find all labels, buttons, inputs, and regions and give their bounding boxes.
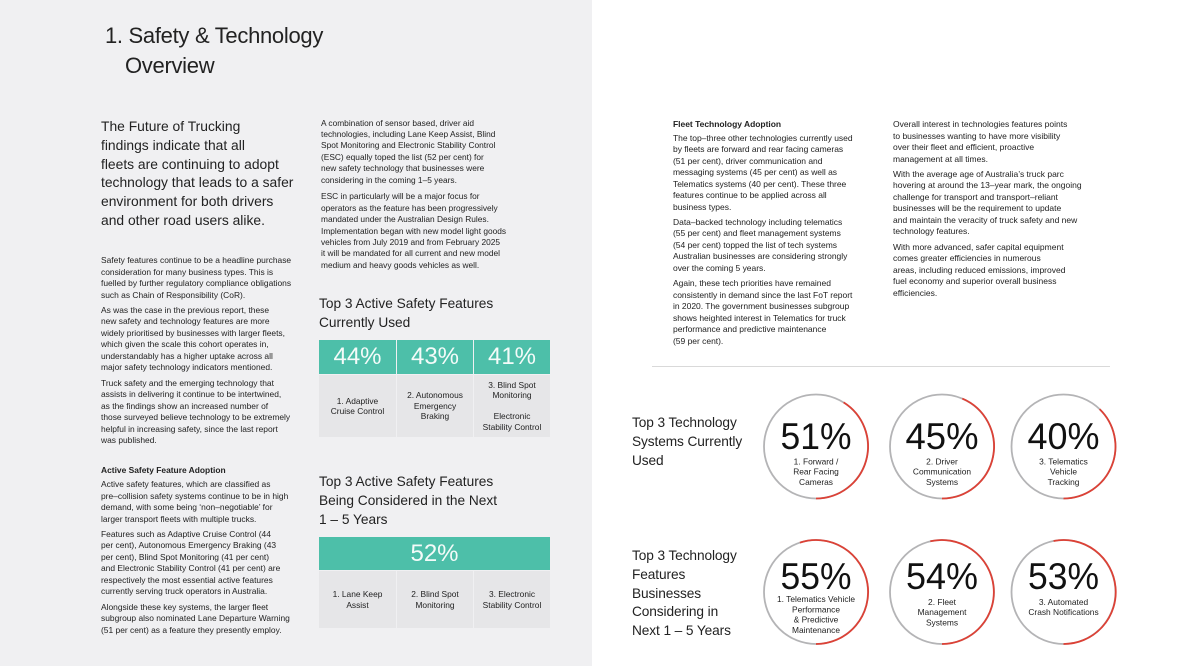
ring: 53 per cent: 53%	[1028, 556, 1099, 597]
ring: 55 per cent	[764, 540, 868, 644]
text block: sensor technologies: Spot Monitoring and Electronic Stability Control	[321, 140, 495, 150]
heading: systems currently used: Top 3 Technology	[632, 415, 737, 430]
stat: 52 per cent: 52%	[410, 540, 459, 566]
text block: overall interest: areas, including reduced emissions, improved	[893, 265, 1065, 275]
text block: fleet technology adoption: (59 per cent).	[673, 336, 723, 346]
text block: overall interest: With more advanced, safer capital equipment	[893, 242, 1064, 252]
ring: 51 per cent: 1. Forward /	[794, 456, 839, 466]
intro text: fleets are continuing to adopt	[101, 156, 279, 172]
ring: 53 per cent	[1012, 540, 1116, 644]
text block: safety features: Safety features continue to be a headline purchase	[101, 255, 291, 265]
label: electronic stability control: 3. Electronic	[489, 589, 535, 599]
text block: safety features: major safety technology indicators mentioned.	[101, 362, 272, 372]
text block: active safety feature adoption: larger transport fleets with multiple trucks.	[101, 514, 256, 524]
ring: 53 per cent: 3. Automated	[1039, 597, 1089, 607]
text block: overall interest: and maintain the veracity of truck safety and new	[893, 215, 1077, 225]
stat: 44 per cent	[319, 340, 396, 374]
label: blind spot and stability control: Monitoring	[492, 390, 532, 400]
text block: fleet technology adoption: performance and predictive maintenance	[673, 324, 826, 334]
label: autonomous emergency braking	[397, 375, 473, 437]
intro text: technology that leads to a safer	[101, 174, 293, 190]
text block: overall interest: hovering at around the 13–year mark, the ongoing	[893, 180, 1082, 190]
label: adaptive cruise control: 1. Adaptive	[337, 396, 378, 406]
text block: sensor technologies: considering in the coming 1–5 years.	[321, 175, 457, 185]
text block: fleet technology adoption: (55 per cent) and fleet management systems	[673, 228, 841, 238]
text block: overall interest: With the average age of Australia’s truck parc	[893, 169, 1064, 179]
text block: fleet technology adoption: Australian businesses are considering strongly	[673, 251, 847, 261]
text block: active safety feature adoption: subgroup also nominated Lane Departure Warning	[101, 613, 290, 623]
ring: 45 per cent: 2. Driver	[926, 456, 958, 466]
text block: fleet technology adoption: Telematics systems (40 per cent). These three	[673, 178, 846, 188]
ring: 55 per cent: 1. Telematics Vehicle	[777, 594, 855, 604]
ring: 54 per cent: 2. Fleet	[928, 597, 957, 607]
text block: safety features: understandably has a higher uptake across all	[101, 351, 273, 361]
table: features currently used	[319, 340, 550, 437]
text block: sensor technologies: it will be mandated for all current and new model	[321, 248, 500, 258]
text block: fleet technology adoption: messaging systems (45 per cent) as well as	[673, 167, 837, 177]
text block: overall interest: businesses will be the requirement to update	[893, 203, 1061, 213]
label: adaptive cruise control: Cruise Control	[331, 406, 384, 416]
heading: features businesses considering: Businesses	[632, 586, 701, 601]
stat: 43 per cent: 43%	[411, 343, 459, 370]
text block: active safety feature adoption: and Electronic Stability Control (41 per cent) are	[101, 563, 280, 573]
text block: safety features	[101, 255, 291, 445]
text block: fleet technology adoption	[673, 118, 853, 346]
ring: 53 per cent: Crash Notifications	[1028, 607, 1099, 617]
text block: active safety feature adoption: pre–collision safety systems continue to be in high	[101, 490, 288, 500]
heading: features being considered	[319, 474, 497, 527]
label: blind spot and stability control	[474, 375, 550, 437]
stat: 44 per cent: 44%	[333, 343, 382, 370]
text block: sensor technologies: technologies, including Lane Keep Assist, Blind	[321, 129, 495, 139]
heading: features being considered: 1 – 5 Years	[319, 512, 388, 527]
ring: 51 per cent: Cameras	[799, 477, 833, 487]
text block: overall interest: technology features.	[893, 226, 970, 236]
text block: active safety feature adoption: Active Safety Feature Adoption	[101, 465, 226, 475]
label: lane keep assist: Assist	[346, 600, 369, 610]
text block: safety features: was published.	[101, 435, 157, 445]
label: lane keep assist	[319, 571, 396, 628]
text block: fleet technology adoption: over the coming 5 years.	[673, 263, 766, 273]
label: electronic stability control	[474, 571, 550, 628]
text block: active safety feature adoption: currently serving truck operators in Australia.	[101, 586, 267, 596]
label: electronic stability control: Stability Control	[483, 600, 541, 610]
text block: fleet technology adoption: (54 per cent) topped the list of tech systems	[673, 240, 837, 250]
text block: active safety feature adoption: Features such as Adaptive Cruise Control (44	[101, 529, 271, 539]
text block: sensor technologies: vehicles from July 2019 and from February 2025	[321, 237, 500, 247]
text block: safety features: Truck safety and the emerging technology that	[101, 378, 274, 388]
heading: features currently used: Currently Used	[319, 315, 410, 330]
text block: fleet technology adoption: The top–three other technologies currently used	[673, 132, 853, 142]
text block: overall interest: fuel economy and superior overall business	[893, 276, 1056, 286]
text block: sensor technologies: mandated under the Australian Design Rules.	[321, 214, 489, 224]
ring: 55 per cent: & Predictive	[794, 614, 839, 624]
label: autonomous emergency braking: 2. Autonomous	[407, 390, 463, 400]
label: lane keep assist: 1. Lane Keep	[333, 589, 382, 599]
ring: 55 per cent: Performance	[792, 604, 840, 614]
text block: safety features: widely prioritised by businesses with larger fleets,	[101, 328, 285, 338]
text block: active safety feature adoption: (51 per cent) as a feature they presently employ.	[101, 625, 282, 635]
text block: fleet technology adoption: in 2020. The government businesses subgroup	[673, 301, 849, 311]
ring: 55 per cent: 55%	[780, 556, 852, 597]
text block: overall interest: efficiencies.	[893, 288, 937, 298]
text block: sensor technologies: ESC in particularly will be a major focus for	[321, 191, 480, 201]
text block: active safety feature adoption: per cent), Blind Spot Monitoring (41 per cent)	[101, 552, 269, 562]
text block: active safety feature adoption: demand, with some being ‘non–negotiable’ for	[101, 502, 273, 512]
ring: 45 per cent: Communication	[913, 466, 971, 476]
ring: 45 per cent: 45%	[906, 416, 978, 457]
text block: fleet technology adoption: business types.	[673, 202, 731, 212]
ring: 54 per cent	[890, 540, 994, 644]
table: features being considered	[319, 537, 550, 628]
text block: fleet technology adoption: Again, these tech priorities have remained	[673, 278, 831, 288]
text block: fleet technology adoption: consistently in demand since the last FoT report	[673, 290, 852, 300]
text block: sensor technologies: A combination of sensor based, driver aid	[321, 118, 474, 128]
intro text	[101, 118, 294, 228]
text block: overall interest: over their fleet and efficient, proactive	[893, 142, 1034, 152]
text block: overall interest: challenge for transport and transport–reliant	[893, 192, 1058, 202]
text block: overall interest: to businesses wanting to have more visibility	[893, 130, 1060, 140]
label: blind spot monitoring: Monitoring	[415, 600, 455, 610]
label: blind spot monitoring: 2. Blind Spot	[411, 589, 459, 599]
label: blind spot monitoring	[397, 571, 473, 628]
text block: overall interest	[893, 119, 1082, 298]
text block: safety features: helpful in increasing safety, since the last report	[101, 424, 278, 434]
ring: 51 per cent: 51%	[780, 416, 852, 457]
ring: 51 per cent	[764, 394, 868, 499]
text block: fleet technology adoption: by fleets are forward and rear facing cameras	[673, 144, 843, 154]
text block: fleet technology adoption: features continue to be applied across all	[673, 190, 827, 200]
intro text: and other road users alike.	[101, 212, 265, 228]
heading: features being considered: Being Considered in the Next	[319, 493, 497, 508]
text block: sensor technologies: Implementation began with new model light goods	[321, 226, 506, 236]
ring: 40 per cent: 40%	[1028, 416, 1100, 457]
text block: fleet technology adoption: Data–backed technology including telematics	[673, 217, 842, 227]
ring: 40 per cent: Vehicle	[1050, 466, 1077, 476]
stat: 41 per cent: 41%	[488, 343, 536, 370]
label: blind spot and stability control: 3. Blind Spot	[488, 380, 536, 390]
text block: active safety feature adoption: Active safety features, which are classified as	[101, 479, 270, 489]
text block: safety features: such as Chain of Responsibility (CoR).	[101, 290, 245, 300]
text block: overall interest: comes greater efficiencies in numerous	[893, 253, 1041, 263]
ring: 45 per cent: Systems	[926, 477, 958, 487]
label: blind spot and stability control: Stability Control	[483, 422, 541, 432]
intro text: The Future of Trucking	[101, 118, 240, 134]
text block: sensor technologies: (ESC) equally toped the list (52 per cent) for	[321, 152, 484, 162]
ring: 55 per cent: Maintenance	[792, 625, 840, 635]
ring: 54 per cent: Management	[918, 607, 967, 617]
heading: features currently used	[319, 296, 493, 330]
text block: safety features: As was the case in the previous report, these	[101, 305, 269, 315]
panel: left grey background	[0, 0, 592, 666]
text block: overall interest: management at all times.	[893, 154, 988, 164]
ring: 45 per cent	[890, 394, 994, 499]
text block: safety features: fuelled by further regulatory compliance obligations	[101, 278, 291, 288]
text block: fleet technology adoption: shows heighted interest in Telematics for truck	[673, 313, 846, 323]
ring: 51 per cent: Rear Facing	[793, 466, 839, 476]
ring: 54 per cent: 54%	[906, 556, 978, 597]
text block: sensor technologies: new safety technology that businesses were	[321, 163, 484, 173]
text block: safety features: as the findings show an increased number of	[101, 401, 268, 411]
label: blind spot and stability control: Electronic	[494, 411, 530, 421]
text block: safety features: consideration for many business types. This is	[101, 266, 273, 276]
heading: features being considered: Top 3 Active Safety Features	[319, 474, 493, 489]
title	[105, 23, 324, 78]
label: autonomous emergency braking: Braking	[421, 411, 449, 421]
text block: active safety feature adoption: Alongside these key systems, the larger fleet	[101, 602, 268, 612]
title: Overview	[125, 53, 214, 78]
label: adaptive cruise control	[319, 375, 396, 437]
heading: features businesses considering: Top 3 Technology	[632, 548, 737, 563]
text block: active safety feature adoption	[101, 465, 290, 635]
text block: active safety feature adoption: respectively the most essential active features	[101, 575, 273, 585]
heading: systems currently used: Systems Currently	[632, 434, 742, 449]
intro text: environment for both drivers	[101, 193, 273, 209]
heading: features currently used: Top 3 Active Safety Features	[319, 296, 493, 311]
text block: fleet technology adoption: Fleet Technology Adoption	[673, 118, 781, 128]
text block: fleet technology adoption: (51 per cent), driver communication and	[673, 156, 822, 166]
text block: sensor technologies: medium and heavy goods vehicles as well.	[321, 260, 479, 270]
ring: 40 per cent: 3. Telematics	[1039, 456, 1088, 466]
heading: features businesses considering: Features	[632, 567, 685, 582]
stat: 43 per cent	[397, 340, 473, 374]
stat: 41 per cent	[474, 340, 550, 374]
text block: safety features: assists in delivering it continue to be intertwined,	[101, 389, 281, 399]
heading: systems currently used: Used	[632, 453, 664, 468]
heading: features businesses considering	[632, 548, 737, 638]
heading: systems currently used	[632, 415, 742, 468]
heading: features businesses considering: Next 1 – 5 Years	[632, 623, 731, 638]
text block: safety features: those surveyed believe technology to be extremely	[101, 412, 290, 422]
text block: overall interest: Overall interest in technologies features points	[893, 119, 1067, 129]
stat: 52 per cent	[319, 537, 550, 570]
ring: 40 per cent	[1012, 394, 1116, 498]
text block: safety features: which given the scale this cohort operates in,	[101, 339, 269, 349]
ring: 54 per cent: Systems	[926, 618, 958, 628]
text block: sensor technologies	[321, 118, 506, 270]
ring: 40 per cent: Tracking	[1048, 477, 1080, 487]
heading: features businesses considering: Considering in	[632, 604, 718, 619]
title: 1. Safety & Technology	[105, 23, 323, 48]
label: autonomous emergency braking: Emergency	[414, 401, 456, 411]
text block: active safety feature adoption: per cent), Autonomous Emergency Braking (43	[101, 540, 276, 550]
text block: sensor technologies: operators as the feature has been progressively	[321, 203, 498, 213]
intro text: findings indicate that all	[101, 137, 245, 153]
text block: safety features: new safety and technology features are more	[101, 316, 270, 326]
